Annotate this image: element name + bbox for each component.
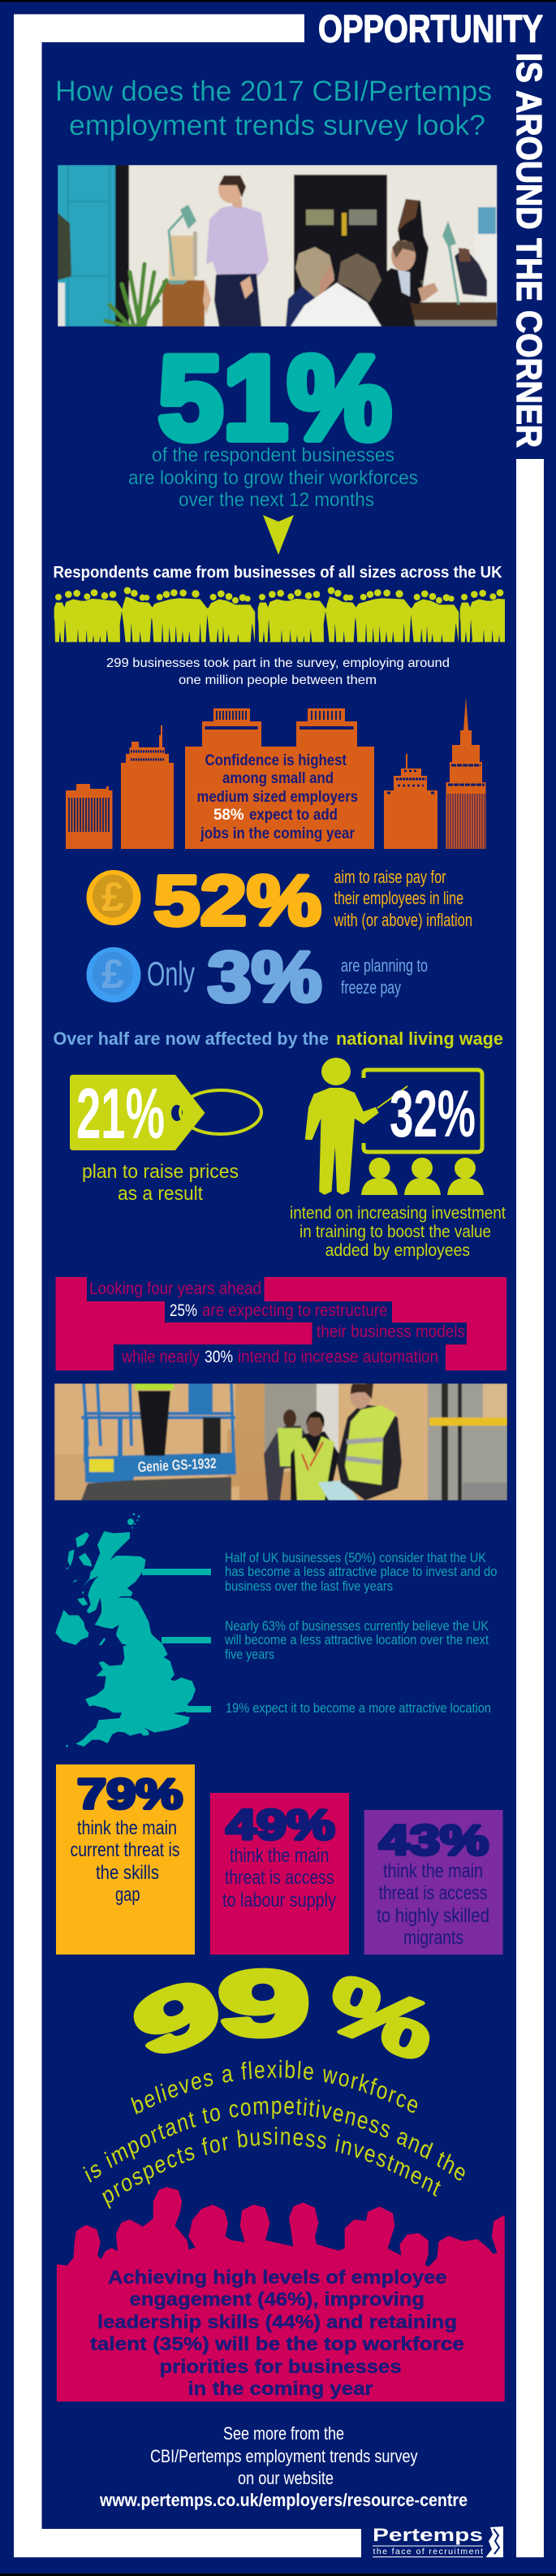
stat: 3%: 3% [208,937,321,1017]
coin: blue pound: £ [101,951,124,997]
arched text: flexible workforce: believes a flexible workforce [131,2060,417,2115]
panel: 79% skills gap: gap [115,1884,140,1906]
northern ireland [55,1610,88,1645]
text: freeze pay: freeze pay [341,977,402,998]
text: workforce priorities: engagement (46%), improving [130,2288,425,2310]
photo: warehouse: Genie GS-1932 [137,1455,217,1475]
text: raise pay: with (or above) inflation [334,910,472,930]
building 4 [384,754,437,849]
text: raise pay: their employees in line [334,888,463,908]
map connector bars [142,1569,211,1712]
text: see more [99,2423,468,2510]
stat: 99% arched: 9 [122,1959,233,2076]
panel: 49% labour supply: think the main [230,1845,330,1867]
stat: 99% arched: 9 [218,1952,310,2054]
panel: 49% labour supply: to labour supply [222,1890,336,1911]
panel: 43% migrants: migrants [403,1927,463,1949]
panel: 43% migrants: think the main [383,1860,483,1882]
islands [66,1532,92,1606]
heading: How does the 2017 CBI/Pertemps [55,76,492,107]
coin: gold pound [86,870,141,925]
text: workforce priorities: leadership skills (44%) and retaining [97,2311,457,2332]
text: see more: CBI/Pertemps employment trends survey [150,2446,418,2466]
panel: 43% migrants: to highly skilled [377,1905,489,1927]
text: see more: on our website [238,2468,334,2488]
text: UK attractiveness: five years [225,1647,274,1662]
arrow down [263,515,294,555]
text: raise pay [334,867,472,930]
stat: 52%: 52% [153,861,321,941]
price tag 21%: 21% [76,1073,165,1154]
skyline with confidence text [66,697,485,849]
text: UK attractiveness: has become a less attractive place to invest and do [225,1565,497,1579]
text: training investment: added by employees [325,1240,470,1260]
panel: 49% labour supply: threat is access [225,1867,334,1889]
arched text: flexible workforce: is important to competitiveness and the [83,2098,464,2183]
panel: 79% skills gap [56,1764,195,1955]
central building: among small and [222,769,334,787]
central building: Confidence is highest [205,751,347,769]
panel: 79% skills gap: the skills [96,1862,159,1884]
panel: looking four years ahead: Looking four years ahead [89,1279,261,1298]
photo: warehouse [54,1381,507,1500]
text: training investment: intend on increasing investment [290,1203,506,1223]
panel: looking four years ahead: while nearly [121,1348,200,1366]
icon: teacher with board 32%: 32% [390,1077,476,1151]
subheading: national living wage: national living wage [336,1028,503,1049]
text: 299 businesses: one million people between them [179,673,377,687]
subheading: respondents: Respondents came from businesses of all sizes across the UK [54,563,502,582]
text: see more: See more from the [223,2423,344,2444]
stat: 99% arched: % [315,1957,447,2079]
logo: pertemps: Pertemps [373,2525,483,2545]
panel: 43% migrants: 43% [379,1817,489,1864]
text: raise prices [82,1161,239,1205]
subheading: national living wage: Over half are now affected by the [54,1028,329,1049]
arched text: flexible workforce: prospects for business investment [102,2127,441,2210]
subheading: national living wage [54,1028,503,1049]
panel: 79% skills gap: 79% [77,1771,183,1818]
panel: 43% migrants: threat is access [379,1882,488,1904]
icon: teacher with board 32% [305,1058,484,1195]
text: UK attractiveness: Nearly 63% of businesses currently believe the UK [225,1619,489,1634]
title: is around the corner vertical: IS AROUND THE CORNER [509,53,549,448]
central building: expect to add [249,806,338,824]
text: training investment: in training to boost the value [300,1222,491,1241]
text: training investment [290,1203,506,1260]
panel: 79% skills gap: current threat is [70,1839,180,1861]
panel: looking four years ahead: intend to increase automation [238,1348,438,1366]
panel: 49% labour supply: 49% [226,1802,334,1849]
coin: blue pound [86,947,141,1002]
stat: 99% arched [122,1952,447,2079]
photo: office meeting [58,165,498,327]
logo: pertemps: the face of recruitment [373,2547,483,2557]
text: workforce priorities: Achieving high levels of employee [108,2266,446,2288]
text: workforce priorities: talent (35%) will be the top workforce [90,2333,464,2354]
pink crowd panel [58,2188,503,2401]
panel: looking four years ahead: 30% [205,1348,233,1366]
central building: 58% [213,806,244,824]
stat text: workforce growth: of the respondent businesses [152,444,394,466]
text: workforce priorities: priorities for businesses [160,2356,402,2377]
crowd silhouette [54,587,505,642]
text: UK attractiveness: business over the last five years [225,1579,393,1594]
central building [185,708,374,849]
building 5 [446,697,485,849]
text: UK attractiveness [224,1551,497,1716]
text: freeze pay [341,955,428,998]
map of UK [55,1513,196,1747]
logo: pertemps [373,2525,503,2557]
stat text: workforce growth: are looking to grow their workforces [128,467,418,489]
text: raise prices: as a result [118,1183,203,1205]
text: 299 businesses [106,656,450,687]
arched text: flexible workforce [83,2060,464,2210]
stat: 51%: 51% [158,331,391,464]
panel: 49% labour supply [210,1793,349,1955]
text: UK attractiveness: will become a less attractive location over the next [224,1633,489,1647]
text: only: Only [147,955,195,993]
stat text: workforce growth: over the next 12 months [179,489,374,511]
panel: looking four years ahead: their business models [317,1323,465,1341]
text: freeze pay: are planning to [341,955,428,976]
text: workforce priorities [90,2266,464,2399]
building 1 [66,784,112,849]
panel: looking four years ahead [55,1277,506,1370]
text: UK attractiveness: 19% expect it to become a more attractive location [226,1701,491,1716]
text: raise pay: aim to raise pay for [334,867,446,887]
text: UK attractiveness: Half of UK businesses (50%) consider that the UK [225,1551,486,1565]
great britain [75,1531,196,1747]
stat text: workforce growth [128,444,418,511]
text: 299 businesses: 299 businesses took part in the survey, employing around [106,656,450,670]
text: see more: www.pertemps.co.uk/employers/resource-centre [99,2490,468,2510]
heading: employment trends survey look? [69,110,485,141]
building 2 [121,725,174,849]
coin: gold pound: £ [101,874,124,920]
panel: looking four years ahead: 25% [170,1301,197,1320]
text: raise prices: plan to raise prices [82,1161,239,1183]
heading [55,76,492,141]
panel: looking four years ahead: are expecting to restructure [202,1301,388,1320]
central building: jobs in the coming year [200,825,355,842]
text: workforce priorities: in the coming year [188,2378,373,2399]
central building: medium sized employers [196,788,358,806]
panel: 79% skills gap: think the main [77,1817,177,1839]
panel: 43% migrants [364,1810,503,1955]
